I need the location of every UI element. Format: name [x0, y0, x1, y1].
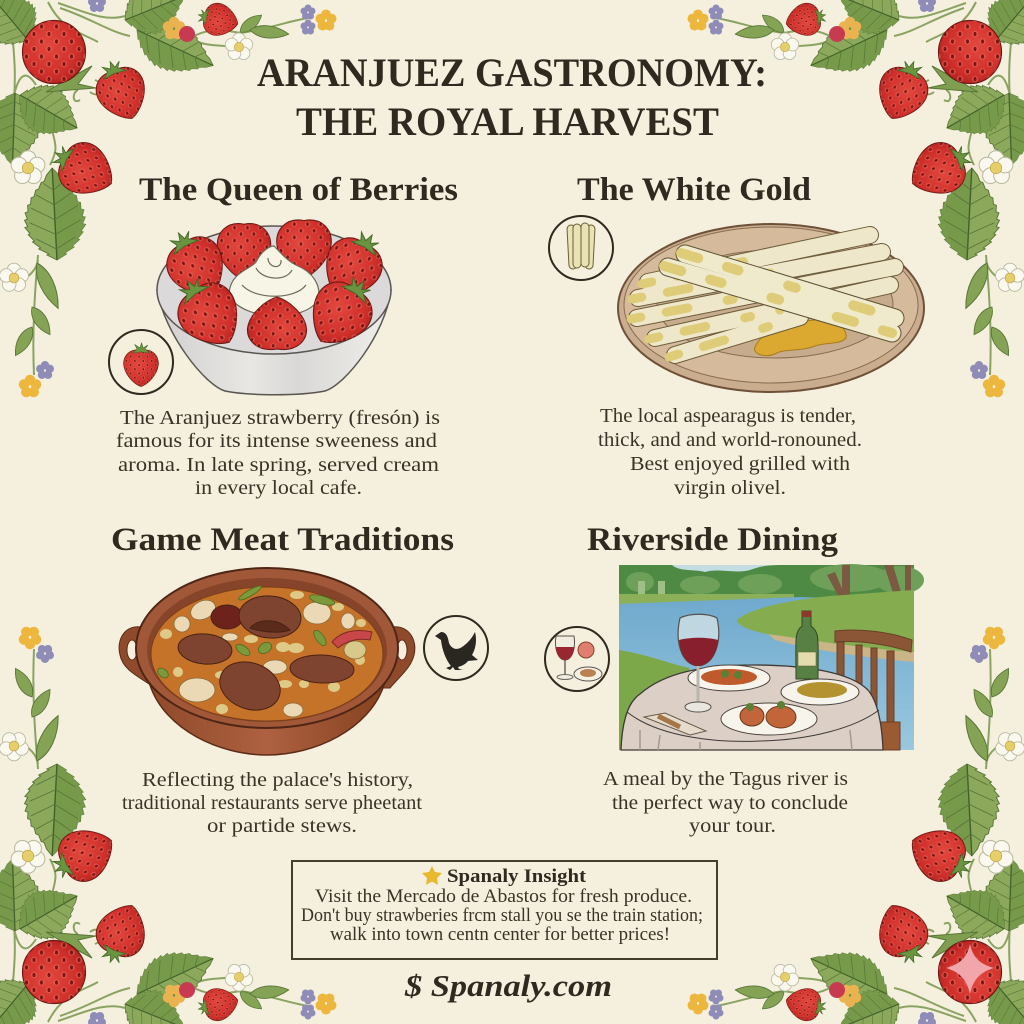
body text: virgin olivel.: [674, 477, 786, 499]
sparkle on bottom-right strawberry: [946, 944, 994, 994]
body text: in every local cafe.: [195, 477, 362, 499]
icon: wine and tapas: [545, 627, 609, 691]
callout body: walk into town centn center for better prices!: [330, 925, 670, 945]
body text: thick, and and world-ronouned.: [598, 429, 862, 451]
heading: Riverside Dining: [587, 522, 839, 558]
callout body: [301, 887, 703, 945]
body text: famous for its intense sweeness and: [116, 430, 437, 452]
olive oil pool: [755, 320, 846, 356]
body text: [116, 407, 440, 499]
table cloth: [621, 665, 883, 750]
far trees: [619, 565, 914, 602]
chair: [835, 630, 912, 750]
callout: spanaly insight: [292, 861, 717, 959]
body text: or partide stews.: [207, 815, 357, 837]
body text: [122, 769, 422, 837]
body text: [598, 405, 862, 499]
bottle: [796, 611, 818, 679]
panel: game meat traditions: [111, 522, 488, 837]
title: [257, 50, 767, 144]
river: [619, 597, 914, 750]
footer: website: $ Spanaly.com: [404, 968, 612, 1003]
napkin and cutlery: [644, 713, 706, 735]
panel: riverside dining: [545, 522, 924, 837]
heading: Game Meat Traditions: [111, 522, 454, 558]
left bank: [619, 650, 690, 750]
floral corner: bottom right: [688, 627, 1024, 1024]
body text: the perfect way to conclude: [612, 792, 848, 814]
heading: The Queen of Berries: [139, 172, 458, 208]
title: ARANJUEZ GASTRONOMY:: [257, 50, 767, 95]
plates: [688, 665, 770, 691]
illustration: plate of white asparagus: [618, 224, 924, 392]
icon: asparagus: [549, 216, 613, 280]
icon: game bird: [424, 616, 488, 680]
body text: The local aspearagus is tender,: [600, 405, 856, 427]
icon: strawberry: [109, 330, 173, 394]
title: THE ROYAL HARVEST: [296, 99, 719, 144]
body text: Reflecting the palace's history,: [142, 769, 413, 791]
panel: the white gold: [549, 172, 924, 499]
body text: A meal by the Tagus river is: [603, 768, 848, 790]
heading: The White Gold: [577, 172, 811, 208]
illustration: clay pot of game stew: [119, 568, 415, 755]
illustration: riverside table scene: [619, 564, 924, 750]
callout body: Visit the Mercado de Abastos for fresh produce.: [315, 887, 692, 907]
callout body: Don't buy strawberies frcm stall you se the train station;: [301, 906, 703, 926]
floral corner: bottom left: [0, 627, 337, 1024]
body text: The Aranjuez strawberry (fresón) is: [120, 407, 440, 429]
body text: [603, 768, 848, 837]
callout heading: Spanaly Insight: [447, 867, 587, 887]
illustration: bowl of strawberries with cream: [153, 220, 396, 395]
body text: traditional restaurants serve pheetant: [122, 792, 422, 814]
wine glass: [678, 614, 719, 712]
floral corner: top left: [0, 0, 337, 397]
floral corner: top right: [688, 0, 1024, 397]
right bank: [737, 590, 914, 655]
body text: aroma. In late spring, served cream: [118, 454, 439, 476]
stew pieces: [160, 591, 366, 714]
panel: the queen of berries: [109, 172, 458, 499]
icon: star: [422, 866, 442, 885]
body text: your tour.: [689, 815, 776, 837]
body text: Best enjoyed grilled with: [630, 453, 850, 475]
